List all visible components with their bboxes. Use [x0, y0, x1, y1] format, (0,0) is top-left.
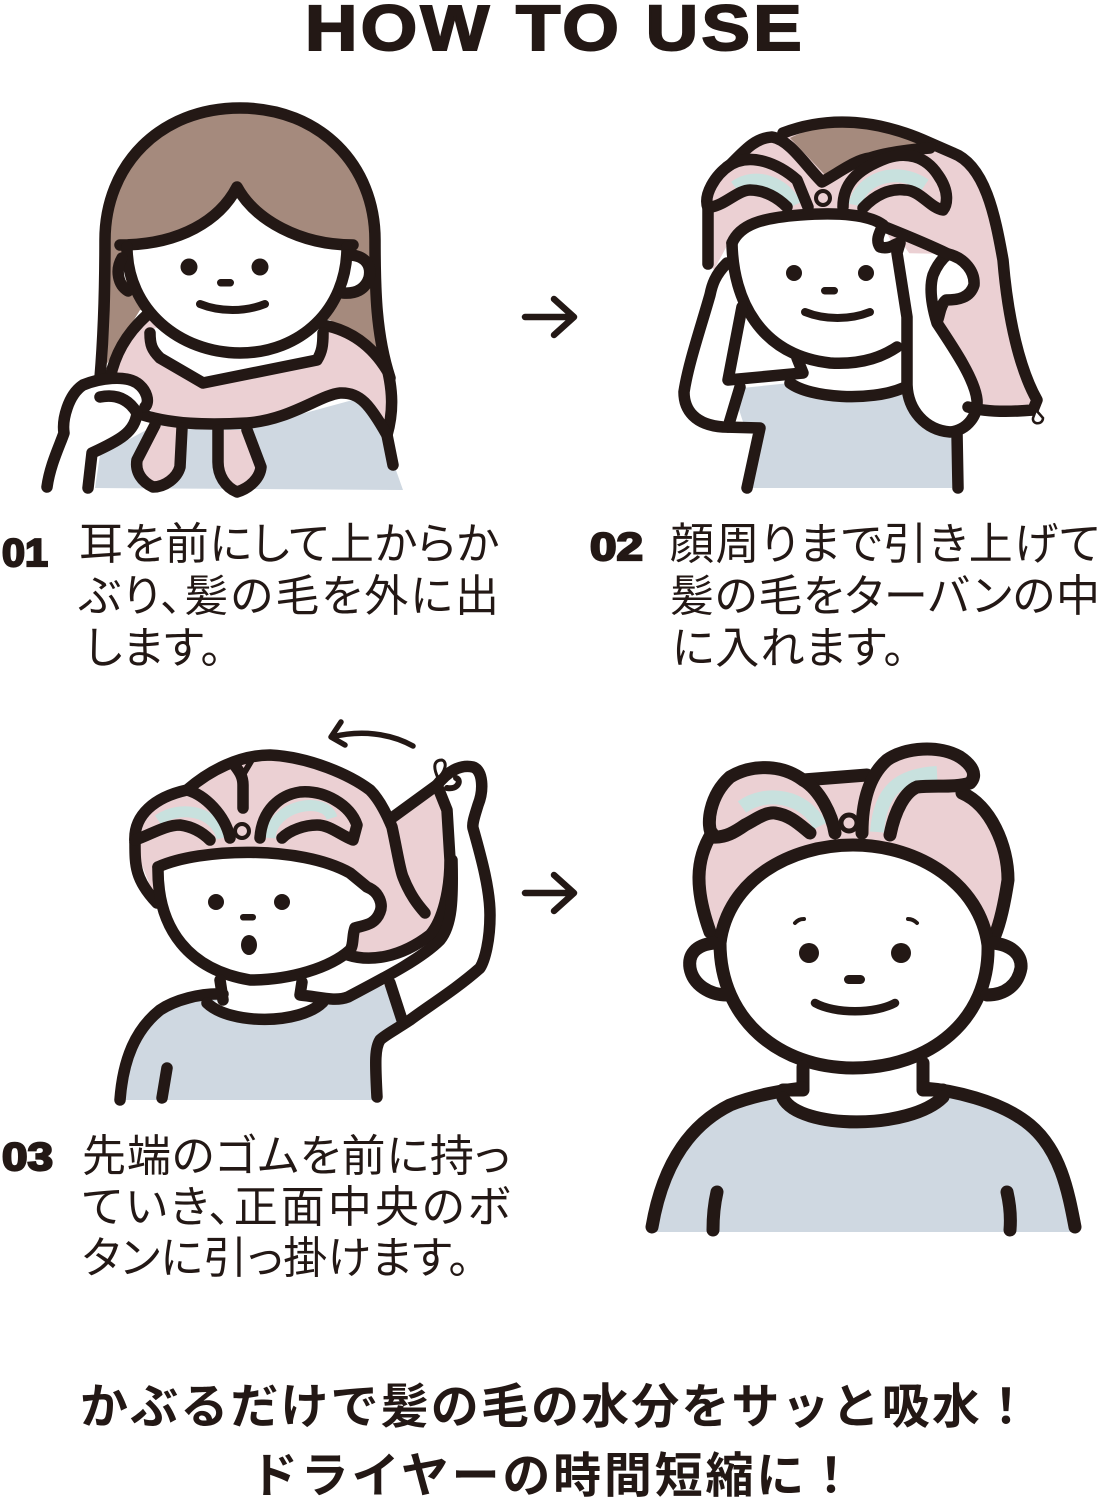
step 1 text: 耳を前にして上からか — [79, 520, 499, 569]
illustration: step 2 pulling the turban up around the face — [684, 122, 1043, 488]
step 3 text: 先端のゴムを前に持っ — [82, 1132, 510, 1181]
illustration: finished turban with ears — [652, 747, 1078, 1232]
step 2 text — [670, 520, 1100, 673]
step 3 text: ていき、正面中央のボ — [82, 1183, 510, 1232]
arrow: step 1 to step 2 — [525, 299, 574, 335]
arrow: direction of the elastic — [331, 722, 413, 746]
step 3 text — [82, 1132, 510, 1283]
step 3 number: 03 — [2, 1136, 53, 1179]
step 1 text — [78, 520, 499, 673]
step 2 text: に入れます。 — [672, 624, 905, 673]
closing message: かぶるだけで髪の毛の水分をサッと吸水！ — [80, 1381, 1030, 1434]
step 3 text: タンに引っ掛けます。 — [82, 1234, 470, 1283]
closing message — [80, 1381, 1030, 1500]
step 1 number: 01 — [2, 532, 48, 575]
illustration: step 1 putting the turban on over the head — [47, 108, 403, 492]
step 1 text: ぶり、髪の毛を外に出 — [78, 572, 499, 621]
step 2 number: 02 — [590, 526, 643, 569]
arrow: step 3 to finished look — [525, 875, 574, 911]
step 2 text: 髪の毛をターバンの中 — [670, 572, 1100, 621]
illustration: step 3 bringing the tip forward — [120, 755, 490, 1100]
step 1 text: します。 — [85, 624, 222, 673]
step 2 text: 顔周りまで引き上げて — [670, 520, 1100, 569]
